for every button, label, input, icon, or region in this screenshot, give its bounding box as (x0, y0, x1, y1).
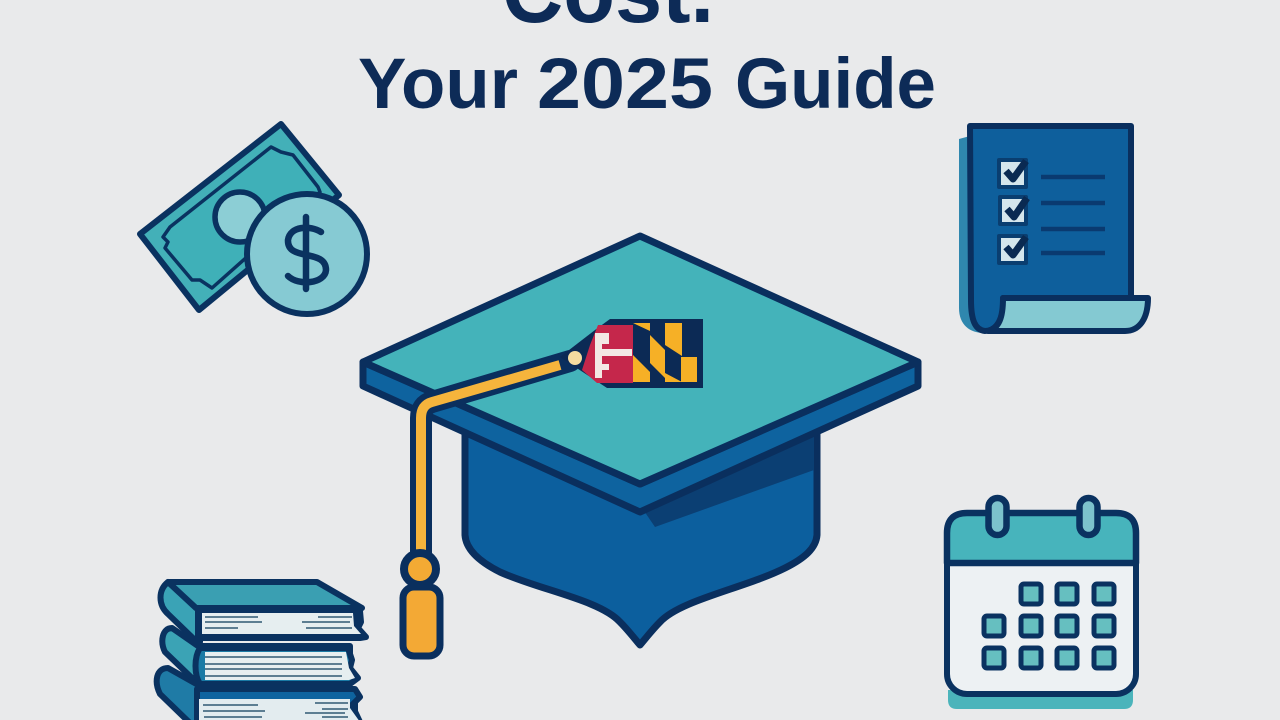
cap skull (465, 430, 817, 645)
title (358, 0, 936, 124)
tag red quarter (582, 325, 633, 383)
banknote inner border (163, 147, 320, 288)
tag eyelet (568, 351, 582, 365)
subtitle: Your 2025 Guide: Guide (735, 45, 936, 124)
calendar header (947, 513, 1136, 563)
top book cover (168, 582, 362, 608)
calendar body (947, 513, 1136, 694)
top book spine (160, 582, 200, 642)
checkbox 1 (999, 160, 1026, 187)
tag gold checker (633, 323, 697, 382)
checklist lines (1041, 177, 1105, 253)
banknote (140, 124, 339, 310)
bottom book (157, 668, 360, 720)
icon: stack of books (157, 582, 366, 720)
icon: money bill and coin (140, 124, 367, 314)
coin (247, 194, 367, 314)
icon: checklist document (959, 126, 1148, 333)
mortarboard thickness (363, 362, 918, 512)
dollar sign (288, 217, 326, 289)
mortarboard top (363, 236, 918, 484)
icon: calendar (947, 498, 1136, 709)
page back edge (959, 136, 1000, 333)
checkbox 3 (999, 236, 1026, 263)
calendar base shadow (948, 690, 1133, 709)
tassel knot (404, 553, 436, 585)
subtitle: Your 2025 Guide: Your (358, 45, 518, 124)
graduation cap (363, 236, 918, 656)
tassel (403, 587, 440, 656)
calendar ring left (988, 498, 1006, 535)
middle book (162, 628, 358, 684)
Maryland flag tag (560, 319, 703, 388)
top book pages (198, 611, 366, 638)
tag shape (560, 319, 703, 388)
calendar date grid (984, 584, 1114, 668)
cap under-board shadow (640, 436, 814, 527)
page curled bottom (988, 298, 1148, 331)
top book page surface (202, 613, 361, 634)
tassel cord outline (421, 361, 570, 560)
tassel cord (421, 365, 560, 556)
checkbox 2 (1000, 197, 1027, 224)
page front (970, 126, 1131, 331)
banknote portrait circle (215, 192, 265, 242)
top book page lines (205, 617, 352, 628)
calendar ring right (1080, 498, 1098, 535)
subtitle: Your 2025 Guide: 2025 (537, 45, 713, 124)
subtitle: Your 2025 Guide (358, 45, 936, 124)
tag cross bottony (595, 333, 632, 378)
